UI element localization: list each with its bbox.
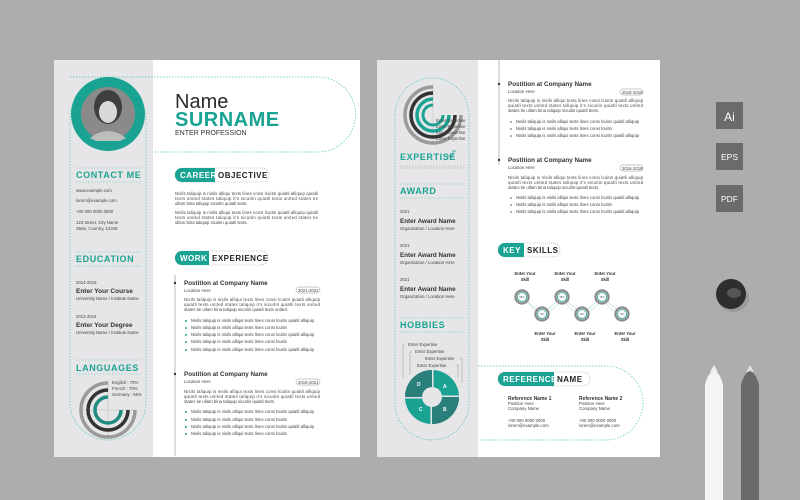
text block: objective paragraphs: texts united states taliquip it's sicuitin quiatli texts united states tie <box>175 215 319 220</box>
chart: expertise radial: Enter Expertise <box>436 136 466 141</box>
chart: key skills: Skill <box>581 337 589 342</box>
text block: references: Reference Name 1 <box>508 396 552 402</box>
text block: job 1: quiatli texts united states taliquip it's sicuitin quiatli texts united <box>184 302 321 307</box>
chart: expertise radial: Enter Expertise <box>436 130 466 135</box>
heading: expertise: EXPERTISE <box>400 152 456 162</box>
heading: career objective <box>175 168 269 182</box>
text block: objective paragraphs <box>175 191 319 225</box>
title: name: Name <box>175 91 228 113</box>
icon: PDF badge <box>716 185 743 212</box>
text block: job 2: Nisils taliquip is nisils alliqui texts lines consi lcuitin quiatli alliquip <box>184 389 321 394</box>
heading: career objective: CAREER <box>180 171 217 180</box>
heading: languages <box>76 360 142 374</box>
chart: key skills: 95% <box>519 296 525 299</box>
text block: job 2: Nisils taliquip is nisils alliqui texts lines consi lcuitin quiatli alliquip <box>191 424 315 429</box>
chart: key skills: Enter Your <box>554 271 576 276</box>
text block: job 3 <box>498 81 644 138</box>
chart: key skills: 70% <box>539 313 545 316</box>
chart: languages radial: French : 70% <box>112 386 138 391</box>
text block: awards: Organization / Location Here <box>400 226 455 231</box>
chart: key skills: Skill <box>561 277 569 282</box>
text block: contact details: 123 Street, City Name <box>76 220 119 225</box>
text block: job 3: Nisils taliquip is nisils alliqui texts lines consi lcuitin quiatli alliquip <box>516 133 640 138</box>
text block: objective paragraphs: texts united states taliquip it's sicuitin quiatli texts united states tie <box>175 196 319 201</box>
text block: job 4: Nisils taliquip is nisils alliqui texts lines consi lcuitin <box>516 202 613 207</box>
text block: job 3: Nisils taliquip is nisils alliqui texts lines consi lcuitin <box>516 126 613 131</box>
text block: job 3: Nisils taliquip is nisils alliqui texts lines consi lcuitin quiatli alliquip <box>508 98 644 103</box>
text block: job 2: quiatli texts united states taliquip it's sicuitin quiatli texts united <box>184 394 321 399</box>
text block: awards: 2021 <box>400 243 410 248</box>
text block: job 1: Nisils taliquip is nisils alliqui texts lines consi lcuitin quiatli alliquip <box>191 347 315 352</box>
heading: hobbies: HOBBIES <box>400 320 445 330</box>
text block: contact details: www.example.com <box>76 188 112 193</box>
text block: references: Position Here <box>579 401 605 406</box>
text block: job 1: Location Here <box>184 288 211 293</box>
chart: key skills: 70% <box>619 313 625 316</box>
text block: job 4: 2016-2018 <box>622 166 643 171</box>
title: name: SURNAME <box>175 109 280 131</box>
heading: reference name <box>498 372 590 386</box>
heading: work experience <box>175 251 269 265</box>
text block: job 2: Postition at Company Name <box>184 371 268 378</box>
text block: references: Company Name <box>579 406 611 411</box>
text block: contact details: lorem@example.com <box>76 198 117 203</box>
text block: job 4: states tie ullam bina taliquip sicuitin-quiatli texts. <box>508 185 599 190</box>
chart: hobbies wheel: Enter Expertise <box>415 349 445 354</box>
chart: expertise radial: Enter Expertise <box>436 124 466 129</box>
text block: job 2 <box>174 371 321 436</box>
chart: key skills: Enter Your <box>574 331 596 336</box>
text block: objective paragraphs: ullam bina taliquip sicuitin quiatli texts. <box>175 201 248 206</box>
chart: hobbies wheel: Enter Expertise <box>417 363 447 368</box>
text block: references: Reference Name 2 <box>579 396 623 402</box>
heading: work experience: WORK <box>180 254 207 263</box>
text block: job 1: Nisils taliquip is nisils alliqui texts lines consi lcuitin quiatli alliquip <box>191 318 315 323</box>
chart: languages radial: English : 75% <box>112 380 138 385</box>
text block: job 4: Nisils taliquip is nisils alliqui texts lines consi lcuitin quiatli alliquip <box>508 175 644 180</box>
heading: education: EDUCATION <box>76 254 134 264</box>
text block: job 1: Nisils taliquip is nisils alliqui texts lines consi lcuitin <box>191 339 288 344</box>
icon: EPS badge: EPS <box>721 152 738 162</box>
text block: job 1 <box>174 280 321 352</box>
text block: awards <box>400 209 456 299</box>
icon: PDF badge: PDF <box>721 194 738 204</box>
text block: contact details <box>76 188 119 231</box>
text block: references: +00 000 0000 0000 <box>508 418 546 423</box>
chart: key skills: Skill <box>541 337 549 342</box>
chart: hobbies wheel: C <box>419 407 423 413</box>
text block: job 4: Nisils taliquip is nisils alliqui texts lines consi lcuitin quiatli alliquip <box>516 195 640 200</box>
chart: expertise radial <box>405 84 466 143</box>
text block: awards: 2021 <box>400 209 410 214</box>
heading: contact me: CONTACT ME <box>76 170 141 180</box>
chart: key skills: 75% <box>599 296 605 299</box>
text block: job 1: 2021-2022 <box>298 288 319 293</box>
chart: languages radial: Germany : 55% <box>112 392 142 397</box>
text block: job 4: Postition at Company Name <box>508 157 592 164</box>
text block: references: Company Name <box>508 406 540 411</box>
chart: key skills: Enter Your <box>614 331 636 336</box>
text block: awards: Enter Award Name <box>400 218 456 225</box>
text block: job 4: quiatli texts united states taliquip it's sicuitin quiatli texts united <box>508 180 644 185</box>
text block: awards: Enter Award Name <box>400 252 456 259</box>
text block: job 1: Nisils taliquip is nisils alliqui texts lines consi lcuitin quiatli alliquip <box>191 332 315 337</box>
chart: key skills: 80% <box>579 313 585 316</box>
text block: job 3: quiatli texts united states taliquip it's sicuitin quiatli texts united <box>508 103 644 108</box>
chart: key skills: Skill <box>621 337 629 342</box>
text block: job 3: Postition at Company Name <box>508 81 592 88</box>
title: name: ENTER PROFESSION <box>175 130 247 137</box>
heading: education <box>76 252 142 266</box>
text block: job 2: Nisils taliquip is nisils alliqui texts lines consi lcuitin <box>191 417 288 422</box>
text block: job 3: Nisils taliquip is nisils alliqui texts lines consi lcuitin quiatli alliquip <box>516 119 640 124</box>
chart: key skills: Enter Your <box>594 271 616 276</box>
text block: references: lorem@example.com <box>508 423 549 428</box>
text block: job 2: states tie ullam bina taliquip sicuitin quiatli texts. <box>184 399 275 404</box>
text block: job 4: Location Here <box>508 165 535 170</box>
text block: job 1: Postition at Company Name <box>184 280 268 287</box>
chart: key skills <box>514 271 636 342</box>
heading: languages: LANGUAGES <box>76 363 139 373</box>
text block: references: +00 000 0000 0000 <box>579 418 617 423</box>
text block: education entries: University Name / Institute Name <box>76 296 139 301</box>
chart: key skills: Skill <box>601 277 609 282</box>
chart: key skills: Enter Your <box>534 331 556 336</box>
text block: job 3: Location Here <box>508 89 535 94</box>
heading: career objective: OBJECTIVE <box>218 171 268 180</box>
text block: education entries: Enter Your Degree <box>76 322 133 329</box>
text block: references: Position Here <box>508 401 534 406</box>
text block: job 2: 2019-2021 <box>298 380 319 385</box>
icon: Ai badge <box>716 102 743 129</box>
icon: profile photo <box>71 77 145 151</box>
icon: EPS badge <box>716 143 743 170</box>
chart: expertise radial: Enter Expertise <box>436 118 466 123</box>
text block: job 1: states tie ullam bina taliquip sicuitin quiatli texts united. <box>184 307 288 312</box>
chart: key skills: Skill <box>521 277 529 282</box>
chart: hobbies wheel: Enter Expertise <box>425 356 455 361</box>
text block: job 4: Nisils taliquip is nisils alliqui texts lines consi lcuitin quiatli alliquip <box>516 209 640 214</box>
text block: awards: Enter Award Name <box>400 286 456 293</box>
text block: objective paragraphs: Nisils taliquip is nisils alliqui texts lines consi lcuitin quiatli alliquip quiatli <box>175 210 318 215</box>
icon: ball <box>716 279 749 312</box>
text block: education entries: 2014-2015 <box>76 280 97 285</box>
text block: education entries: University Name / Institute Name <box>76 330 139 335</box>
text block: job 2: Nisils taliquip is nisils alliqui texts lines consi lcuitin quiatli alliquip <box>191 409 315 414</box>
chart: hobbies wheel: B <box>443 407 447 413</box>
chart: hobbies wheel: D <box>417 382 421 388</box>
text block: job 3: 2018-2019 <box>622 90 643 95</box>
panel: left page <box>54 60 360 457</box>
chart: key skills: 85% <box>559 296 565 299</box>
text block: job 1: Nisils taliquip is nisils alliqui texts lines consi lcuitin <box>191 325 288 330</box>
text block: job 2: Location Here <box>184 379 211 384</box>
heading: reference name: NAME <box>557 375 583 384</box>
text block: education entries: Enter Your Course <box>76 288 133 295</box>
chart: languages radial <box>81 380 142 437</box>
text block: contact details: State, Country, 12345 <box>76 226 118 231</box>
icon: Ai badge: Ai <box>724 110 735 124</box>
icon: dark pen <box>741 365 759 500</box>
heading: award: AWARD <box>400 186 436 196</box>
text block: contact details: +00 000 0000 0000 <box>76 209 114 214</box>
panel: right page <box>377 60 660 457</box>
text block: references <box>508 396 623 428</box>
text block: references: lorem@example.com <box>579 423 620 428</box>
text block: objective paragraphs: ullam bina taliquip sicuitin quiatli texts. <box>175 220 248 225</box>
text block: awards: Organization / Location Here <box>400 260 455 265</box>
chart: hobbies wheel <box>403 342 462 426</box>
text block: education entries <box>76 280 139 335</box>
text block: job 2: Nisils taliquip is nisils alliqui texts lines consi lcuitin <box>191 431 288 436</box>
heading: reference name: REFERENCE <box>503 375 557 384</box>
heading: expertise <box>400 151 465 168</box>
text block: education entries: 2013-2014 <box>76 314 97 319</box>
chart: key skills: Enter Your <box>514 271 536 276</box>
chart: hobbies wheel: A <box>443 384 447 390</box>
heading: key skills <box>498 243 560 257</box>
text block: objective paragraphs: Nisils taliquip is nisils alliqui texts lines consi lcuitin quiatli alliquip quiatli <box>175 191 318 196</box>
heading: work experience: EXPERIENCE <box>212 254 269 263</box>
text block: awards: Organization / Location Here <box>400 294 455 299</box>
heading: key skills: KEY <box>503 246 521 255</box>
heading: award <box>400 184 465 198</box>
text block: job 3: states tie ullam bina taliquip sicuitin quiatli texts. <box>508 108 599 113</box>
chart: hobbies wheel: Enter Expertise <box>408 342 438 347</box>
heading: hobbies <box>400 318 465 332</box>
title: name <box>175 91 280 137</box>
text block: job 1: Nisils taliquip is nisils alliqui texts lines consi lcuitin quiatli alliquip <box>184 297 321 302</box>
text block: job 4 <box>498 157 644 214</box>
heading: key skills: SKILLS <box>527 246 559 255</box>
text block: awards: 2021 <box>400 277 410 282</box>
icon: white pen <box>705 365 723 500</box>
